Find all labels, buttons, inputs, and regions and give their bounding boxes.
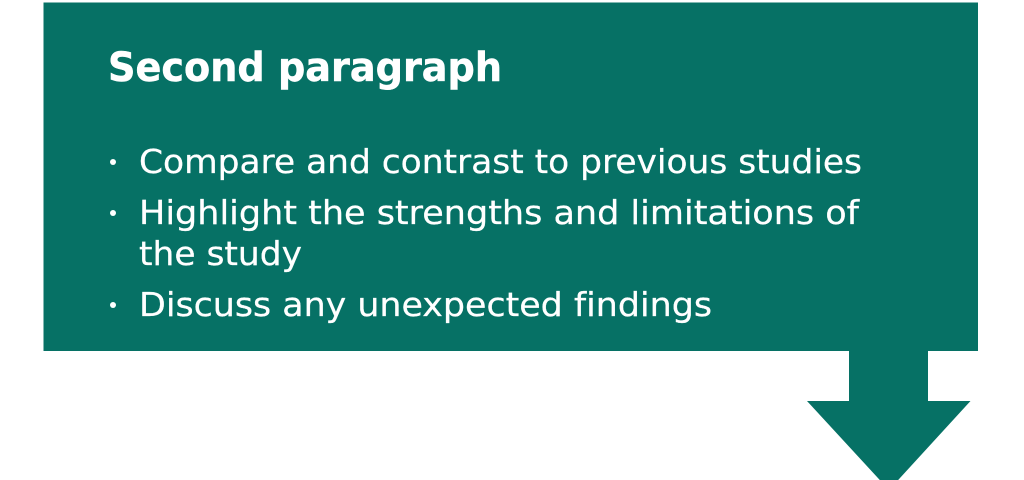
heading: Second paragraph: [108, 45, 502, 91]
panel: second paragraph: [44, 2, 978, 351]
bullet 3: Discuss any unexpected findings: [139, 285, 712, 324]
bullet 1: Compare and contrast to previous studies: [139, 142, 862, 181]
bullet 2: the study: [139, 234, 302, 273]
bullet 2: Highlight the strengths and limitations of: [139, 193, 860, 232]
bullet list: [110, 142, 862, 324]
bullet 2: [110, 193, 860, 273]
arrow pointing down: [807, 350, 970, 480]
